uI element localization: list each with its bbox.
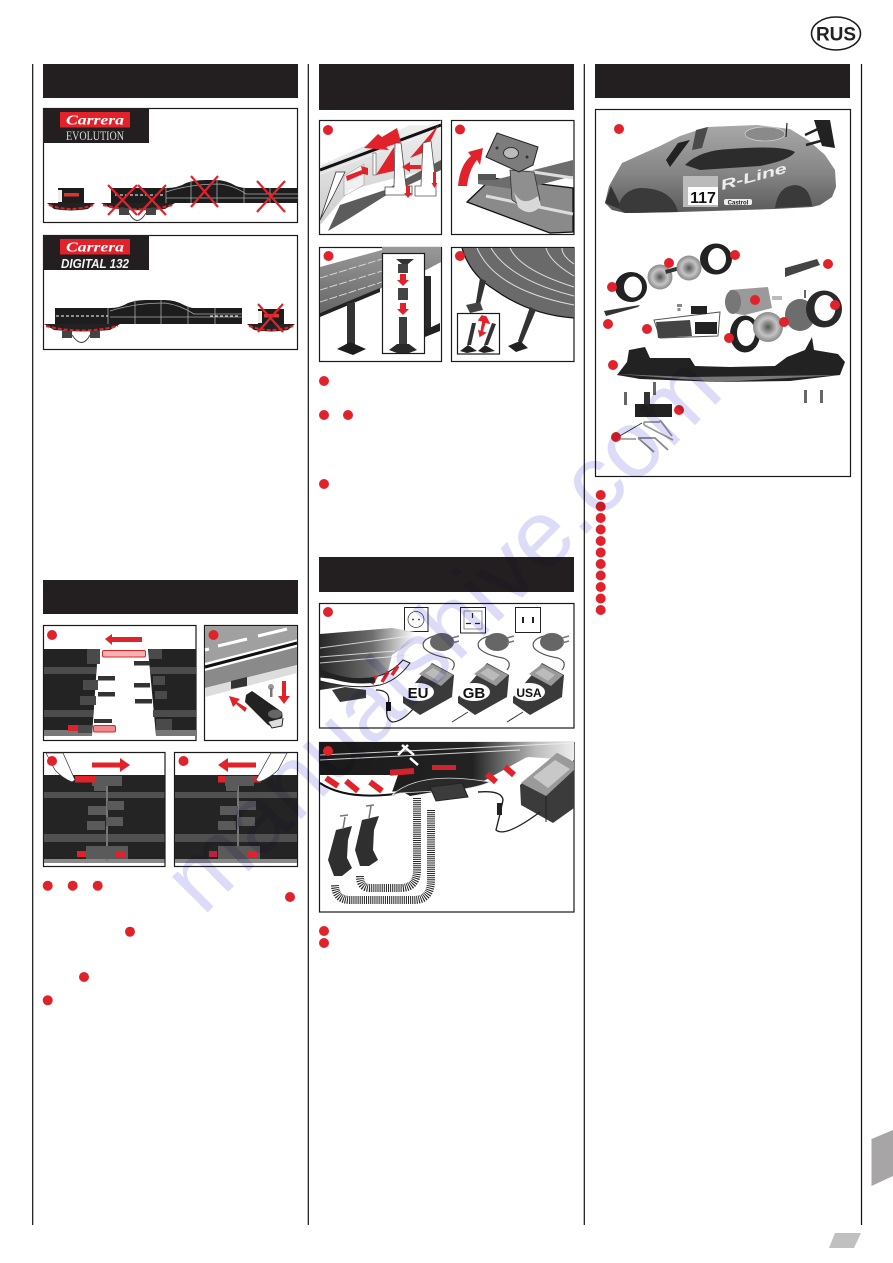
- panel: support unfolded: [452, 120, 574, 234]
- panel: mains adapters EU GB USA: [320, 604, 574, 728]
- panel: Carrera Evolution track: [43, 108, 298, 222]
- heading bar: connecting track: [43, 580, 298, 614]
- car body photo: Castrol: [728, 200, 749, 206]
- wheel set front: [730, 290, 842, 352]
- icon: UK socket: [460, 608, 486, 633]
- page number tab: [829, 1233, 861, 1248]
- guide keel part: [785, 259, 820, 277]
- heading bar: column 3: [595, 64, 850, 98]
- step markers: column 2 text: [319, 376, 353, 489]
- adapter: GB: GB: [463, 685, 485, 702]
- adapter: USA: USA: [516, 686, 542, 700]
- adapter: GB: [452, 633, 514, 722]
- wheel set rear: [615, 244, 732, 302]
- adapter: EU: [402, 633, 459, 715]
- car body photo: [605, 120, 836, 213]
- watermark: manualshive.com: [143, 334, 741, 932]
- motor: [725, 287, 782, 315]
- adapter: USA: [507, 633, 569, 722]
- panel D: pushing clip left: [174, 752, 298, 866]
- parts list markers: [596, 490, 606, 615]
- icon: US socket: [516, 608, 540, 632]
- bracket: [604, 305, 640, 316]
- heading bar: supports: [319, 64, 574, 110]
- panel: fitting guard rail: [320, 120, 442, 234]
- step markers: column 1 text: [43, 881, 295, 1005]
- callout leaders: [618, 423, 642, 439]
- panel: Carrera Digital 132 track: [43, 235, 298, 350]
- panel: banked curve with supports: [452, 248, 574, 362]
- step markers: column 2 lower text: [319, 926, 329, 948]
- panel: Carrera Digital 132 track: Carrera: [66, 240, 124, 256]
- icon: hand controller right: [355, 805, 379, 866]
- screws: [624, 382, 823, 405]
- panel: Carrera Digital 132 track: DIGITAL 132: [61, 256, 130, 271]
- panel B: connector screw: [204, 626, 298, 740]
- car body photo: 117: [690, 190, 716, 207]
- icon: hand controller left: [328, 815, 352, 876]
- car body photo: R-Line: [719, 160, 789, 193]
- panel C: pushing clip right: [44, 752, 165, 866]
- chassis: [617, 337, 845, 382]
- guide keel: [635, 392, 673, 452]
- heading bar: column 1 top: [43, 64, 298, 98]
- adapter: EU: EU: [408, 685, 428, 702]
- part number markers: [603, 124, 840, 442]
- coiled cord 2: [335, 810, 431, 900]
- panel A: track connection clips: [44, 626, 196, 740]
- panel: track connection with controllers: [320, 742, 574, 912]
- icon: transformer: [520, 753, 574, 823]
- language badge: RUS: [812, 17, 860, 50]
- language tab: [872, 1130, 893, 1186]
- motor cover: [654, 304, 720, 338]
- panel: car exploded view: [596, 110, 850, 476]
- heading bar: power supply: [319, 557, 574, 592]
- coiled cord 1: [360, 798, 417, 888]
- panel: Carrera Evolution track: EVOLUTION: [66, 128, 124, 143]
- panel: track on supports: [320, 247, 442, 362]
- language badge: RUS: RUS: [816, 24, 856, 46]
- icon: EU socket: [404, 608, 428, 632]
- panel: Carrera Evolution track: Carrera: [66, 114, 124, 128]
